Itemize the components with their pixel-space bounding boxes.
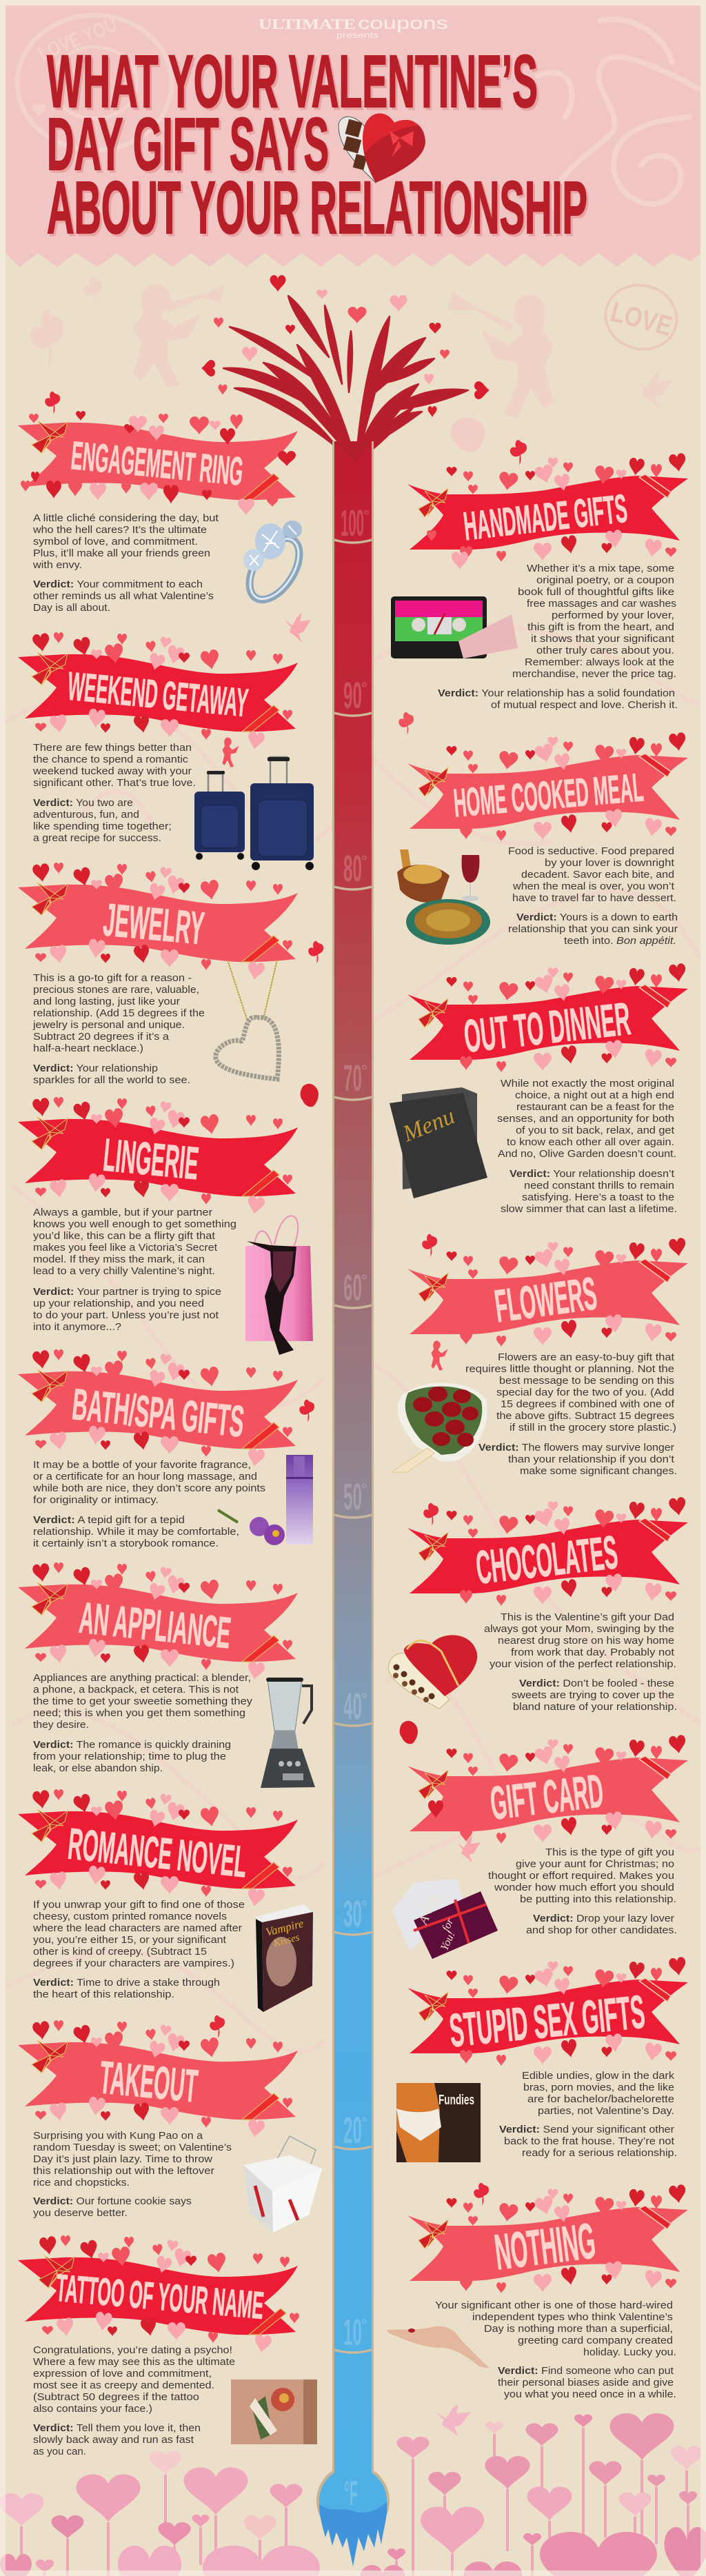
body text [33,2131,232,2219]
panel: engagement ring [18,411,310,614]
icon: rose bouquet [392,1382,487,1472]
body text: satisfying. Here’s a toast to the [522,1192,674,1203]
body text: Flowers are an easy-to-buy gift that [498,1352,674,1363]
body text: Verdict: You two are [33,798,133,809]
temperature labels: ° [361,1271,367,1289]
banner [18,863,298,981]
banner [407,963,688,1072]
panel: flowers [392,1237,688,1477]
body text: wonder how much effort you should [494,1882,674,1893]
body text: back to the frat house. They’re not [504,2136,674,2147]
body text: you what you need once in a while. [504,2389,676,2400]
body text: always got your Mom, swinging by the [484,1624,674,1635]
body text: greeting card company created [518,2335,673,2346]
body text: like spending time together; [33,821,172,832]
body text: leak, or else abandon ship. [33,1763,163,1774]
body text: weekend tucked away with your [32,766,192,777]
icon: menu book [390,1087,487,1198]
icon: perfume bottle and flower [218,1455,313,1545]
temperature labels: 50 [343,1476,362,1518]
body text [484,1612,677,1713]
thermometer bulb [316,2464,390,2537]
body text: Verdict: The flowers may survive longer [478,1442,674,1453]
body text: the heart of this relationship. [33,1989,174,2000]
body text: degrees if your characters are vampires.) [33,1958,234,1969]
body text: Day is nothing more than a superficial, [484,2324,673,2335]
icon: tattoo photo [231,2379,317,2444]
body text: A little cliché considering the day, but [33,513,219,524]
body text: the time to get your sweetie something they [33,1696,253,1707]
panel: jewelry: JEWELRY [101,894,206,955]
thermometer [316,441,390,2566]
body text: the chance to spend a romantic [33,754,188,765]
body text: where the lead characters are named after [32,1923,242,1934]
body text: Verdict: The romance is quickly draining [33,1740,231,1751]
body text: it certainly isn’t a storybook romance. [33,1538,219,1549]
temperature labels: 30 [343,1893,362,1935]
body text: parties, not Valentine’s Day. [538,2106,674,2117]
temperature labels: 10 [343,2312,362,2353]
body text: rice and chopsticks. [33,2177,130,2188]
banner [407,732,688,841]
body text [33,1207,236,1333]
body text: significant other. That’s true love. [33,778,196,789]
panel: nothing [387,2184,688,2400]
logo [259,14,448,40]
temperature labels: ° [361,1690,367,1707]
body text: Food is seductive. Food prepared [508,846,674,857]
body text: you’d like, this can be a flirty gift that [33,1231,215,1242]
body text: 15 degrees if combined with one of [501,1399,675,1410]
body text [438,563,678,711]
body text: are for bachelor/bachelorette [527,2094,674,2105]
body text: make some significant changes. [520,1466,677,1477]
body text: Surprising you with Kung Pao on a [33,2131,203,2142]
panel: tattoo of your name [18,2235,317,2457]
body text: senses, and an opportunity for both [497,1114,674,1125]
body text [32,973,205,1086]
body text: as you can. [33,2446,86,2457]
body text: Whether it’s a mix tape, some [527,563,674,574]
body text: cheesy, custom printed romance novels [33,1911,227,1922]
body text: And no, Olive Garden doesn’t count. [498,1149,676,1160]
body text: relationship. (Add 15 degrees if the [33,1008,205,1019]
banner [18,1789,298,1908]
temperature labels: ° [361,2114,367,2131]
body text: Where a few may see this as the ultimate [33,2357,235,2368]
body text: from work that day. Probably not [511,1647,674,1658]
logo: ULTIMATE [259,16,356,32]
panel: home cooked meal [397,732,688,947]
body text: other is kind of creepy. (Subtract 15 [33,1946,207,1958]
body text: Remember: always look at the [525,657,674,668]
body text: up your relationship, and you need [33,1298,204,1309]
body text: If you unwrap your gift to find one of those [33,1900,245,1911]
body text: nearest drug store on his way home [498,1636,674,1647]
icon: Fundies box [396,2083,481,2162]
body text: Always a gamble, but if your partner [33,1207,212,1218]
body text: performed by your lover, [552,610,674,621]
icon: gift bag with lace [245,1216,313,1355]
body text: Appliances are anything practical: a blender, [33,1673,251,1684]
body text: It may be a bottle of your favorite fragrance, [33,1460,251,1471]
icon: heart chocolate box [388,1635,477,1709]
body text: lead to a very chilly Valentine’s night. [33,1266,215,1277]
body text [435,2300,676,2400]
body text: Day it’s just plain lazy. Time to throw [33,2154,213,2165]
body text: than your relationship if you don’t [508,1454,674,1465]
fireworks bursting from the thermometer [201,275,490,462]
body text: sparkles for all the world to see. [33,1075,190,1086]
body text: This is a go-to gift for a reason - [33,973,192,984]
body text: to do your part. Unless you’re just not [33,1310,219,1321]
icon: open hand [387,2326,490,2368]
body text: Edible undies, glow in the dark [522,2071,675,2082]
panel: romance novel: ROMANCE NOVEL [65,1819,250,1886]
banner [407,452,688,570]
logo: presents [336,30,379,40]
body text: choice, a night out at a high end [515,1090,674,1101]
body text: relationship that you can sink your [508,924,678,935]
banner [18,632,298,751]
body text: expression of love and commitment, [33,2368,212,2379]
banner [407,2184,688,2293]
panel: lingerie [18,1097,313,1355]
panel: out to dinner [390,963,688,1215]
body text: relationship. While it may be comfortable, [33,1527,239,1538]
body text: other truly cares about you. [536,645,674,656]
body text: their personal biases aside and give [498,2377,674,2388]
body text: other reminds us all what Valentine’s [33,591,214,602]
body text: Verdict: Our fortune cookie says [33,2196,192,2207]
panel: gift card [392,1734,688,1959]
body text: random Tuesday is sweet; on Valentine’s [33,2142,232,2153]
body text: Verdict: Your relationship [33,1063,158,1074]
body text: have to travel far to have dessert. [512,893,676,904]
body text: most see it as creepy and demented. [33,2380,214,2391]
body text: Verdict: Your commitment to each [33,579,203,590]
body text: original poetry, or a coupon [536,575,674,586]
panel: romance novel [18,1789,313,2012]
body text: and shop for other candidates. [526,1925,677,1936]
body text: requires little thought or planning. Not the [465,1364,674,1375]
firework hearts [201,275,490,417]
banner [18,1349,298,1468]
body text: who the hell cares? It’s the ultimate [32,525,207,536]
body text [508,846,678,947]
body text: of you to sit back, relax, and get [516,1125,674,1136]
body text: bland nature of your relationship. [513,1702,677,1713]
body text: sweets are trying to cover up the [512,1690,674,1701]
icon: bread, wine and plate [397,849,490,945]
body text [32,1460,265,1549]
panel: bath and spa gifts [18,1349,313,1549]
body text: or a certificate for an hour long massage, and [33,1471,257,1482]
body text: also contains your face.) [33,2404,152,2415]
body text: Verdict: Yours is a down to earth [516,912,678,923]
body text: bras, porn movies, and the like [523,2082,674,2093]
panel: takeout: TAKEOUT [97,2051,200,2113]
banner [407,1237,688,1347]
header stamp watermark [17,13,172,150]
header pink panel [6,6,700,267]
icon: gift card and envelope [392,1879,498,1959]
body text: while both are nice, they don’t score any points [32,1483,265,1494]
banner: engagement ring [18,411,298,515]
body text: knows you well enough to get something [33,1219,236,1230]
panel: takeout [18,2020,322,2233]
body text: for originality or intimacy. [33,1495,159,1506]
body text: While not exactly the most original [501,1078,674,1089]
temperature labels: 60 [343,1267,362,1309]
body text [32,743,196,844]
icon: blender [261,1678,315,1788]
panel: engagement ring: ENGAGEMENT RING [69,433,245,494]
body text: book full of thoughtful gifts like [518,587,674,598]
banner [18,1562,298,1681]
body text: and long lasting, just like your [33,996,180,1007]
body text: Congratulations, you’re dating a psycho! [33,2345,232,2356]
body text: give your aunt for Christmas; no [516,1859,674,1870]
body text: need constant thrills to remain [524,1180,674,1191]
body text: with envy. [32,560,82,571]
body text [32,513,219,614]
banner [407,1734,688,1844]
body text: Subtract 20 degrees if it’s a [33,1032,170,1043]
panel: weekend getaway: WEEKEND GETAWAY [65,664,250,725]
ice on bulb [319,2502,387,2566]
thermometer: 100 [341,503,364,544]
icon: Fundies box: Fundies [438,2093,474,2108]
body text: independent types who think Valentine’s [472,2312,673,2323]
body text: they desire. [33,1720,89,1731]
body text: There are few things better than [33,743,192,754]
body text [33,1673,253,1774]
body text: into it anymore...? [33,1322,121,1333]
temperature labels: ° [361,679,367,696]
icon: vampire book: Vampire [264,1917,305,1939]
icon: chocolate heart box [339,113,425,183]
body text: Verdict: Tell them you love it, then [33,2423,201,2434]
banner [18,1097,298,1216]
header stamp watermark: LOVE YOU [35,13,120,66]
icon: suitcases [194,757,314,870]
banner [18,2020,298,2139]
body text [465,1352,677,1477]
body text: be putting into this relationship. [520,1894,676,1905]
panel: an appliance [18,1562,315,1788]
body text: jewelry is personal and unique. [32,1020,185,1031]
panel: lingerie: LINGERIE [101,1129,201,1189]
body text: holiday. Lucky you. [583,2347,676,2358]
body text: Verdict: A tepid gift for a tepid [33,1515,185,1526]
icon: gift card and envelope: A Gift [416,1891,443,1928]
title [47,40,589,251]
body text: This is the type of gift you [545,1847,674,1858]
banner [407,1956,688,2066]
icon: vampire book [256,1904,313,2012]
panel: jewelry [18,863,298,1086]
body text: this gift is from the heart, and [527,622,674,633]
body text [499,2071,677,2159]
temperature labels: 80 [343,848,362,889]
temperature labels: ° [361,2316,367,2333]
body text: Verdict: Send your significant other [499,2124,674,2135]
body text [32,1900,245,2000]
body text: it shows that your significant [531,634,674,645]
body text: Your significant other is one of those hard-wired [435,2300,673,2311]
background cupids and stamp: LOVE [607,296,675,342]
body text: Verdict: Time to drive a stake through [33,1978,220,1989]
body text: the above gifts. Subtract 15 degrees [496,1411,674,1422]
icon: gift card and envelope: for [440,1916,456,1933]
panel: an appliance: AN APPLIANCE [77,1593,233,1658]
body text: half-a-heart necklace.) [33,1043,143,1054]
body text: Day is all about. [33,603,110,614]
icon: mix tape and card [391,596,518,658]
body text: model. If they miss the mark, it can [33,1254,205,1265]
icon: gift card and envelope: You! [438,1929,458,1953]
body text: to know each other all over again. [507,1137,674,1148]
body text: by your lover is downright [545,858,674,869]
icon: heart necklace [216,960,279,1079]
body text: merchandise, never the price tag. [512,669,676,680]
body text: of mutual respect and love. Cherish it. [491,700,678,711]
body text: Verdict: Drop your lazy lover [533,1913,674,1924]
background cupids and stamp [30,277,684,452]
body text: from your relationship; time to plug the [33,1751,226,1762]
panel: weekend getaway [18,632,314,870]
body text: your vision of the perfect relationship. [490,1659,676,1670]
body text: slow simmer that can last a lifetime. [501,1204,677,1215]
body text [497,1078,677,1215]
body text: Verdict: Find someone who can put [498,2366,674,2377]
body text: you deserve better. [33,2208,128,2219]
body text: thought or effort required. Makes you [488,1871,674,1882]
temperature labels: ° [361,1898,367,1915]
body text: special day for the two of you. (Add [496,1387,674,1398]
temperature labels: 70 [343,1058,362,1099]
body text: need; this is when you get them something [33,1708,245,1719]
panel: handmade gifts [391,452,688,711]
temperature labels [341,503,370,2513]
body text [488,1847,677,1936]
temperature labels: ° [361,852,367,869]
body text: when the meal is over, you won’t [512,881,674,892]
body text: Verdict: Your relationship doesn’t [510,1169,674,1180]
title: DAY GIFT SAYS [47,103,329,185]
logo: coupons [358,14,448,33]
small decorations: butterflies, roses, cupids [45,392,527,2437]
body text: symbol of love, and commitment. [33,536,198,547]
body text: Plus, it’ll make all your friends green [33,548,210,559]
body text: decadent. Savor each bite, and [521,869,674,881]
body text: This is the Valentine’s gift your Dad [501,1612,674,1623]
temperature labels: ° [363,507,370,524]
title: DAY GIFT SAYS [49,105,331,188]
body text: makes you feel like a Victoria’s Secret [33,1242,217,1254]
panel: chocolates [388,1496,688,1713]
body text: if still in the grocery store plastic.) [510,1422,676,1433]
temperature labels: 20 [343,2110,362,2151]
body text: best message to be sending on this [499,1376,674,1387]
temperature labels: °F [344,2474,358,2513]
body text: Verdict: Your partner is trying to spice [33,1287,221,1298]
temperature labels: ° [361,1480,367,1498]
body text: this relationship out with the leftover [33,2166,214,2177]
temperature labels: ° [361,1062,367,1079]
body text: Verdict: Don’t be fooled - these [519,1678,674,1689]
body text: free massages and car washes [527,598,676,610]
body text: you, you’re either 15, or your significant [33,1935,226,1946]
body text: ready for a serious relationship. [522,2148,677,2159]
panel: tattoo of your name: TATTOO OF YOUR NAME [54,2266,265,2327]
banner [407,1496,688,1606]
body text: teeth into. Bon appétit. [564,936,676,947]
body text [33,2345,235,2457]
panel: bath and spa gifts: BATH/SPA GIFTS [70,1379,247,1447]
body text: (Subtract 50 degrees if the tattoo [33,2392,199,2403]
header swirl watermark [538,19,700,207]
body text: restaurant can be a feast for the [516,1102,674,1113]
icon: takeout box [243,2136,322,2233]
body text: slowly back away and run as fast [33,2435,194,2446]
icon: menu book: Menu [399,1103,458,1147]
temperature labels: 40 [343,1686,362,1727]
body text: Verdict: Your relationship has a solid foundation [438,688,675,699]
temperature ticks [334,540,372,2353]
icon: vampire book: Kisses [272,1932,301,1949]
body text: precious stones are rare, valuable, [33,985,199,996]
body text: a great recipe for success. [33,833,161,844]
icon: diamond ring [239,521,310,608]
body text: adventurous, fun, and [33,809,139,821]
background swirls [0,625,706,2052]
temperature labels: 90 [343,675,362,716]
bottom heart garden [0,2413,706,2576]
banner [18,2235,299,2354]
thermometer tube [332,441,374,2472]
panel: stupid sex gifts [396,1956,688,2162]
body text: a phone, a backpack, et cetera. This is not [33,1684,239,1695]
